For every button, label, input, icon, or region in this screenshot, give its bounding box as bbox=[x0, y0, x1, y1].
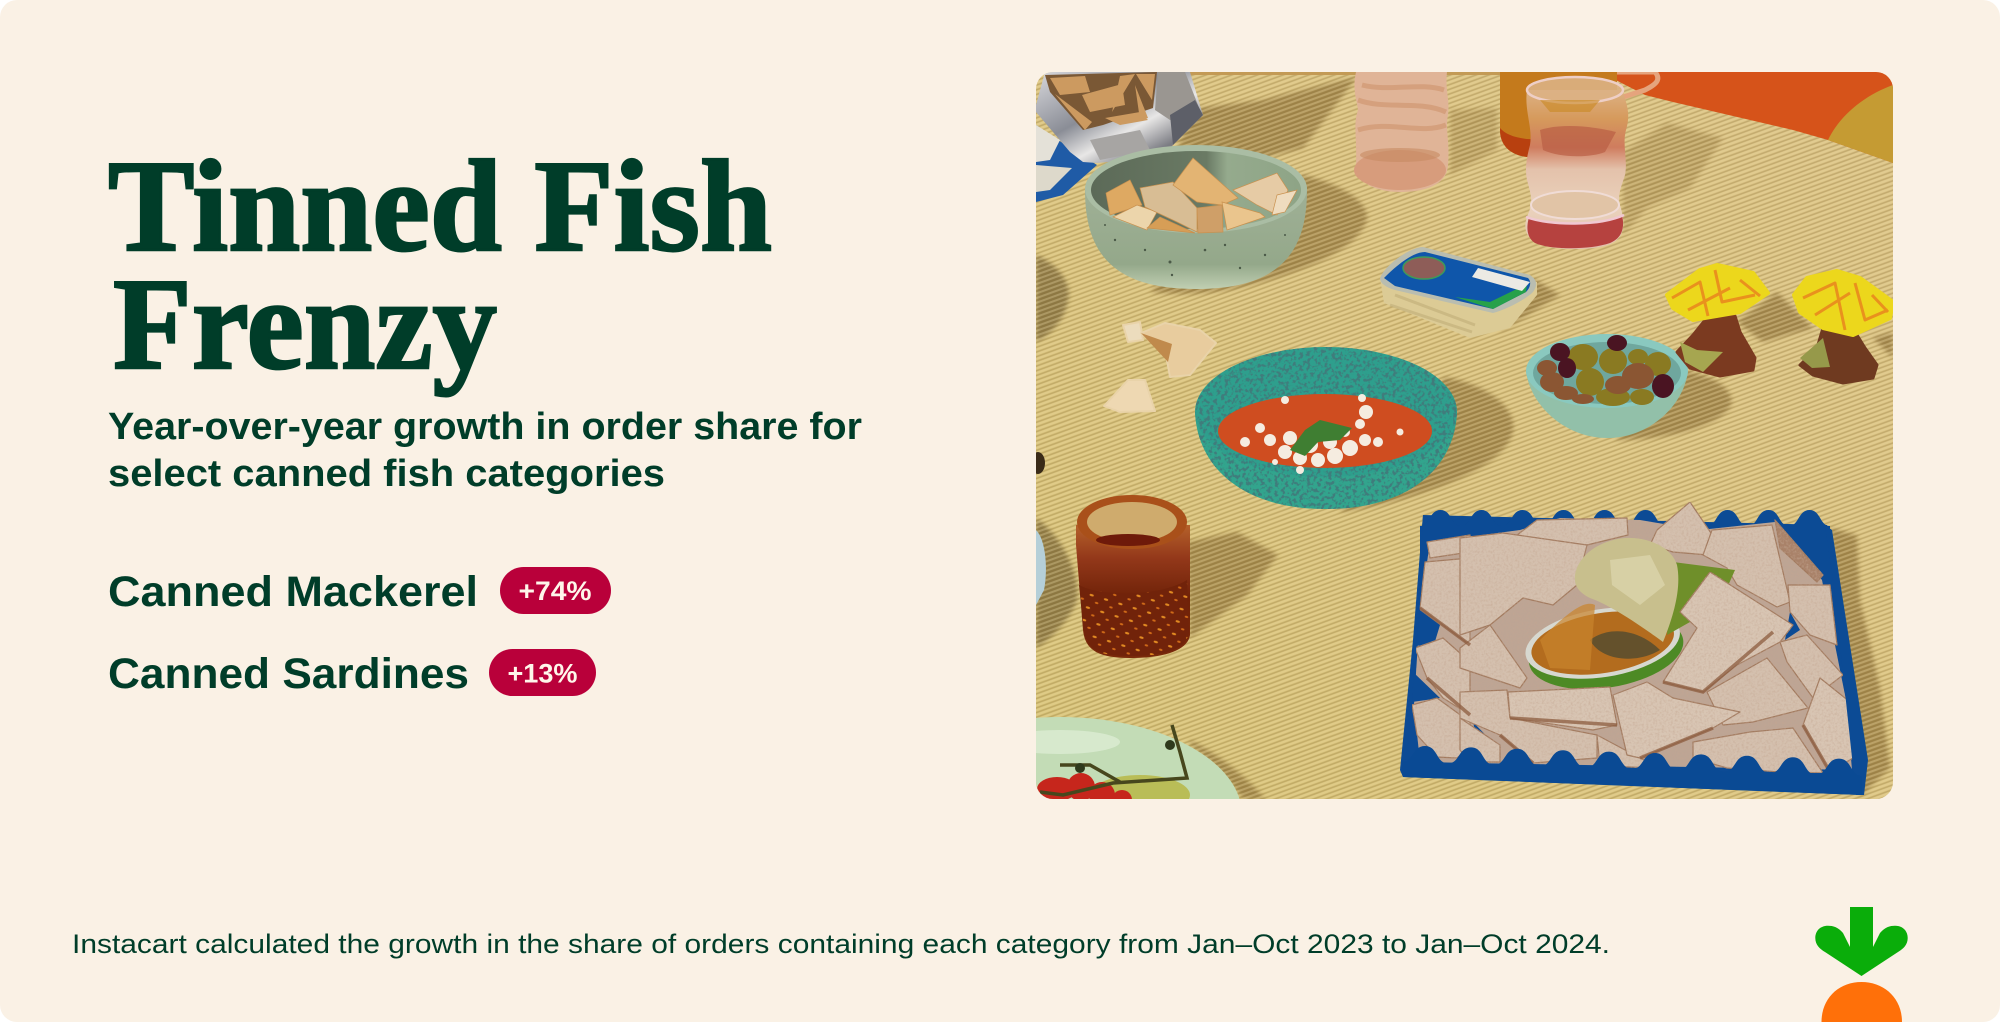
peeled lid bbox=[1575, 538, 1678, 642]
title bbox=[108, 134, 772, 397]
stat: canned sardines: Canned Sardines bbox=[108, 650, 469, 698]
chip bag bbox=[1036, 72, 1203, 202]
chili oil jar bbox=[1076, 495, 1190, 658]
weave texture bbox=[1036, 72, 1893, 799]
crispbread base layer bbox=[1414, 518, 1852, 770]
green bowl with pita chips bbox=[1085, 145, 1307, 289]
tablecloth bbox=[1036, 72, 1893, 799]
stat: canned mackerel bbox=[108, 567, 611, 616]
mustard chair bbox=[1828, 85, 1893, 163]
open sardine tin bbox=[1520, 538, 1735, 700]
pink glass with water bbox=[1525, 77, 1628, 249]
subtitle bbox=[108, 406, 862, 495]
stat: canned mackerel: Canned Mackerel bbox=[108, 568, 478, 616]
vine bbox=[1040, 725, 1187, 795]
footnote: Instacart calculated the growth in the share of orders containing each category from Jan–Oct 2023 to Jan–Oct 2024. bbox=[72, 929, 1610, 959]
dark object at left edge bbox=[1036, 452, 1045, 474]
pink glass, left bbox=[1354, 72, 1448, 192]
title: Frenzy bbox=[113, 252, 497, 397]
pita crumbs bbox=[1104, 322, 1216, 412]
logo: Instacart carrot bbox=[1815, 907, 1908, 1022]
badge: +74%: +74% bbox=[518, 576, 592, 606]
badge: +13%: +13% bbox=[508, 658, 578, 688]
mushroom figurine right bbox=[1794, 271, 1893, 383]
herb garnish bbox=[1290, 420, 1352, 456]
subtitle: Year-over-year growth in order share for bbox=[108, 406, 862, 448]
gaps showing tray bbox=[1414, 610, 1800, 734]
tray right wall bbox=[1825, 525, 1868, 795]
plate with tomatoes bbox=[1036, 717, 1240, 799]
pita chips bbox=[1106, 158, 1297, 233]
sardine can bbox=[1380, 247, 1537, 338]
feta crumbles bbox=[1240, 394, 1404, 474]
glaze specks bbox=[1104, 224, 1286, 276]
red pepper dip bbox=[1218, 394, 1432, 468]
olive bowl bbox=[1526, 334, 1688, 438]
light blue dish at left edge bbox=[1036, 530, 1046, 605]
tomatoes bbox=[1037, 773, 1132, 799]
subtitle: select canned fish categories bbox=[108, 453, 665, 495]
amber pitcher bbox=[1500, 72, 1658, 157]
title: Tinned Fish bbox=[108, 134, 772, 279]
olives bbox=[1537, 335, 1674, 406]
crispbread crust edges bbox=[1420, 608, 1830, 772]
teal bowl with dip bbox=[1195, 347, 1457, 509]
orange chair backdrop bbox=[1600, 72, 1893, 163]
badge: +74% bbox=[500, 567, 611, 614]
crispbread back layer bbox=[1412, 502, 1843, 773]
tray front wall bbox=[1402, 746, 1862, 795]
table shadows bbox=[1036, 77, 1893, 799]
crispbread front layer bbox=[1508, 572, 1853, 772]
photo: table spread with tinned fish bbox=[1036, 72, 1893, 799]
mushroom figurine left bbox=[1667, 265, 1768, 376]
top-edge sliver bbox=[1190, 72, 1500, 75]
blue scalloped tray with crispbread and open tin bbox=[1400, 502, 1868, 795]
tray back wall bbox=[1420, 510, 1830, 552]
badge: +13% bbox=[489, 649, 596, 696]
tray left wall bbox=[1400, 515, 1423, 777]
tray floor bbox=[1403, 515, 1862, 795]
